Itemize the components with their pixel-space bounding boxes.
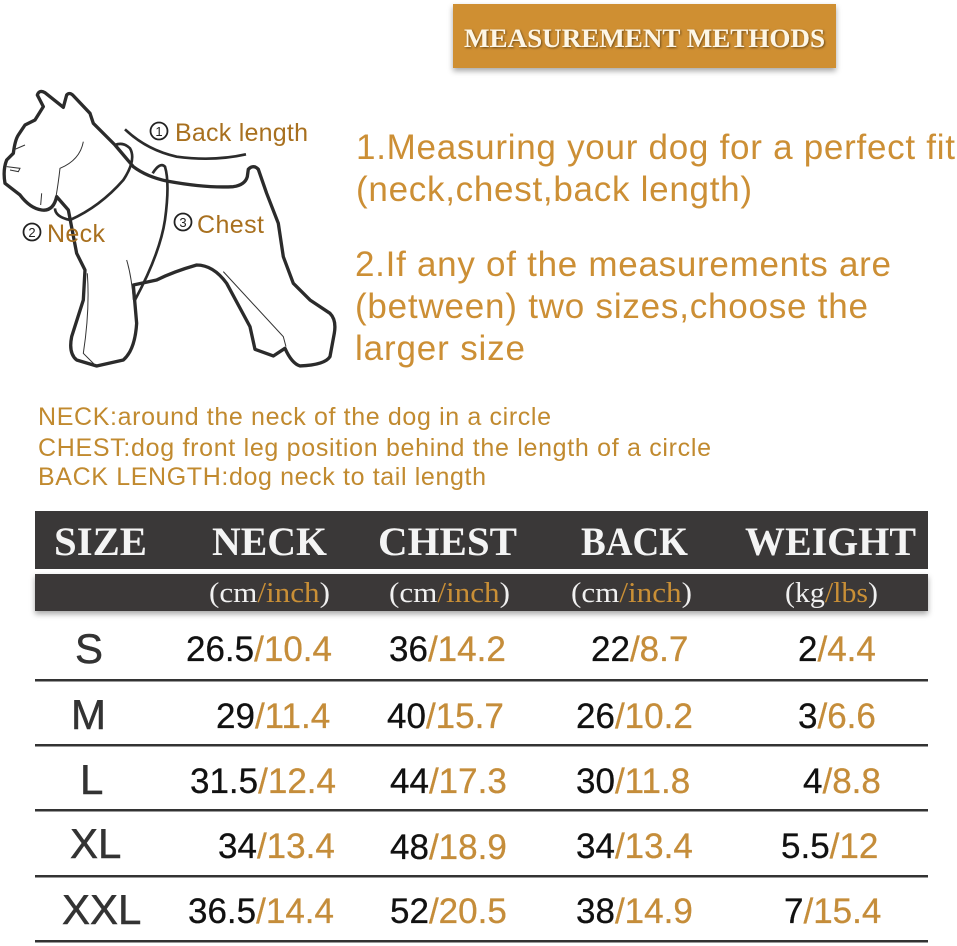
table header: CHEST [378,519,517,564]
row: XXL: 52/20.5 [390,892,507,931]
table units row: (cm/inch) [571,578,692,609]
row: XL: XL [70,820,121,867]
title banner [453,4,836,68]
row: L: 31.5/12.4 [190,762,336,801]
measuring instructions [355,128,955,368]
row: S [35,625,928,682]
table header: WEIGHT [745,519,916,564]
label: neck: Neck [47,220,106,248]
row: L: 4/8.8 [803,762,881,801]
label: back length: 1 [155,124,163,139]
table units row: (cm/inch) [209,578,330,609]
row: M: M [71,691,106,738]
row: L: 30/11.8 [576,762,690,801]
row: L: 44/17.3 [390,762,507,801]
table units row: (cm/inch) [389,578,510,609]
table header [35,511,928,569]
table units row: (kg/lbs) [785,578,878,609]
row: M [35,691,928,746]
definitions text: CHEST:dog front leg position behind the length of a circle [38,434,711,462]
label: neck: 2 [28,225,36,240]
row: XXL: 38/14.9 [576,892,693,931]
dog outline [4,91,335,366]
measuring instructions: 1.Measuring your dog for a perfect fit [356,128,955,167]
fine detail lines [7,142,286,365]
row: M: 3/6.6 [798,697,876,736]
row: M: 29/11.4 [216,697,330,736]
definitions text: BACK LENGTH:dog neck to tail length [38,463,486,491]
row: S: 36/14.2 [389,630,506,669]
row: XXL: 36.5/14.4 [188,892,334,931]
row: M: 26/10.2 [576,697,693,736]
row: S: 2/4.4 [798,630,876,669]
row: M: 40/15.7 [387,697,504,736]
definitions text [38,403,711,491]
dog diagram [4,91,335,366]
row: L [35,756,928,812]
label: chest: 3 [179,215,187,230]
measuring instructions: (neck,chest,back length) [356,170,752,209]
chest strap [135,165,167,300]
row: XL: 34/13.4 [576,827,693,866]
row: XXL [35,886,928,942]
table header: NECK [212,519,327,564]
row: XL: 48/18.9 [390,828,507,867]
row: S: 22/8.7 [591,630,688,669]
label: chest: Chest [197,211,264,239]
row: XXL: 7/15.4 [784,892,881,931]
table header: SIZE [54,519,147,564]
collar [55,144,132,220]
row: S: 26.5/10.4 [186,630,332,669]
back length line [125,129,246,159]
table units row [35,574,928,611]
table header: BACK [581,519,688,564]
measuring instructions: 2.If any of the measurements are [355,245,891,284]
row: XL: 34/13.4 [218,827,335,866]
row: L: L [80,756,103,803]
row: XL: 5.5/12 [781,827,878,866]
measuring instructions: (between) two sizes,choose the [355,287,868,326]
row: XL [35,820,928,878]
title banner: MEASUREMENT METHODS [464,24,825,53]
row: XXL: XXL [62,886,141,933]
label: back length: Back length [175,119,308,147]
measuring instructions: larger size [355,329,525,368]
row: S: S [75,625,103,672]
definitions text: NECK:around the neck of the dog in a circle [38,403,551,431]
